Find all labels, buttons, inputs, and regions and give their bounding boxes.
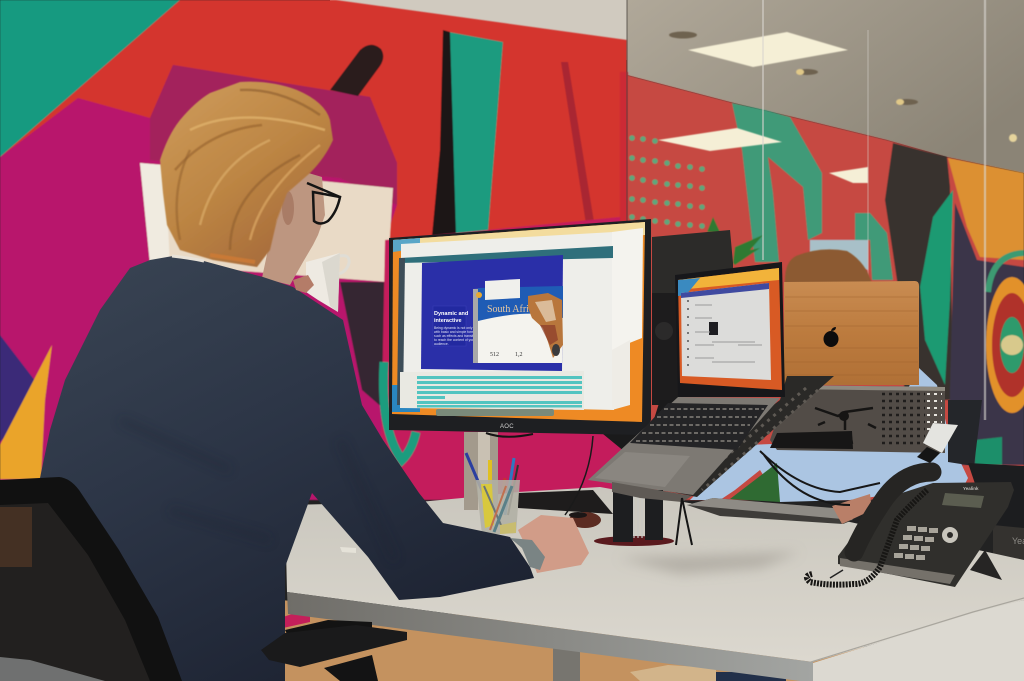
- ear: [282, 191, 294, 225]
- second desk: [813, 600, 1024, 681]
- small paper on desk: [340, 547, 356, 553]
- circular mural emblem: [986, 277, 1024, 413]
- monitor logo: AOC: [500, 424, 514, 430]
- mural: magenta block: [0, 65, 397, 500]
- desk phone: Yealink: [963, 486, 979, 491]
- desk seam: [811, 598, 1024, 662]
- timeline panel: [400, 371, 584, 410]
- right side panel: [612, 228, 643, 350]
- floor under desk: [280, 600, 1024, 681]
- phone nav pad: [942, 527, 958, 543]
- dark mural panel: [885, 143, 953, 400]
- open laptop: [588, 262, 785, 495]
- blue trouser of second person: [716, 672, 786, 681]
- laptop stand base: [594, 482, 692, 546]
- phone display: [942, 493, 984, 508]
- chair frame: [0, 477, 182, 681]
- navy mural panel: [948, 203, 1024, 465]
- hand on mouse: [518, 515, 589, 573]
- dark riser arm: [770, 431, 853, 449]
- laptop keyboard deck: [588, 397, 780, 495]
- dock: [436, 409, 554, 416]
- mesh pencil cup with pens: [466, 453, 520, 535]
- background dark monitor behind: [948, 400, 1024, 560]
- monitor foot shadow: [486, 433, 533, 437]
- monitor cable: [565, 436, 593, 515]
- metal pen holder: [464, 432, 498, 510]
- armrest: [261, 625, 407, 667]
- laptop stand perforated tray: [662, 376, 834, 497]
- slide text block: Being dynamic is not only: [434, 326, 473, 330]
- pale floor stripe: [630, 665, 716, 681]
- coiled cord: [807, 490, 927, 585]
- mug: [306, 253, 349, 312]
- slide text block: to reach the content of your: [434, 338, 476, 342]
- monitor bezel: [389, 219, 651, 435]
- seated person: [40, 82, 589, 681]
- sweater torso and arm: [40, 256, 534, 681]
- desk: [285, 487, 1024, 681]
- mural: yellow triangle: [0, 345, 52, 479]
- monitor app window: [401, 232, 614, 410]
- mural wall: [0, 0, 640, 500]
- desk front edge: [287, 592, 813, 681]
- hair: [160, 82, 333, 267]
- wrist watch: [510, 538, 545, 570]
- mural: dark cup strip: [340, 282, 387, 410]
- slide white card: 1,2: [515, 352, 522, 358]
- desk leg: [553, 640, 580, 681]
- slide text block: [433, 306, 480, 346]
- wooden laptop lid: [784, 281, 919, 385]
- desk phone: [807, 472, 1014, 587]
- glass edges: [627, 0, 985, 420]
- glasses: [307, 183, 340, 224]
- trackpad: [595, 452, 690, 487]
- mural: plum cup lid: [150, 65, 397, 205]
- phone lower strip: [840, 558, 955, 584]
- slide white card: [473, 279, 563, 363]
- ceiling lights: [658, 32, 1017, 183]
- person two behind laptop: [690, 249, 968, 502]
- slide blue background: [421, 255, 563, 371]
- mural: black band shadow: [432, 30, 456, 236]
- second person shirt: [690, 368, 968, 502]
- mural: lower magenta: [380, 215, 640, 500]
- phone keypad: [894, 526, 938, 560]
- teal reflected stripes: [732, 103, 822, 262]
- mural: cream cup: [140, 163, 393, 282]
- magenta strip under arm: [283, 608, 310, 628]
- pale blue window reflection: [810, 240, 868, 270]
- mural: red stripe: [561, 62, 594, 224]
- cables: [760, 451, 880, 505]
- laptop lid: [675, 262, 785, 397]
- back of armrest: [285, 620, 372, 640]
- white adapter: [917, 423, 958, 463]
- phone stand: [970, 550, 1002, 580]
- sweater folds: [120, 420, 395, 560]
- monitor arm and pole: [603, 230, 733, 452]
- tablet on desk: [687, 498, 853, 524]
- slide text block: audience.: [434, 342, 449, 346]
- plant behind monitor: [707, 217, 763, 265]
- mural: teal corner: [0, 0, 180, 157]
- mural: teal arc: [383, 362, 416, 460]
- ceiling: [330, 0, 1024, 173]
- second person hair: [785, 249, 872, 284]
- cord thin lead: [830, 570, 843, 578]
- mural: black straw: [330, 45, 383, 96]
- chair base bottom: [0, 657, 105, 681]
- black desk mat: [518, 490, 613, 514]
- riser mount bracket: [815, 408, 876, 444]
- slide text block: with basic and simple forms: [434, 330, 476, 334]
- Africa map: [528, 293, 563, 358]
- skin face and neck: [262, 172, 325, 285]
- slide text block: such as effects and transitions: [434, 334, 480, 338]
- slide text block: Dynamic and: [434, 311, 468, 317]
- card blue header: [478, 286, 563, 321]
- phone handset: [854, 472, 932, 552]
- office chair: [0, 477, 407, 681]
- card popup: [485, 279, 520, 300]
- card stat numbers: 512: [490, 352, 499, 358]
- phone body: [838, 482, 1014, 587]
- green mural arc: [988, 253, 1024, 292]
- desk shadow: [618, 552, 800, 574]
- perforated laptop riser plate: [770, 385, 945, 453]
- hand on mug: [293, 275, 314, 293]
- hair strands: [175, 90, 325, 262]
- slide text block: interactive: [434, 318, 462, 324]
- collar: [172, 256, 204, 261]
- apple logo: [824, 327, 838, 347]
- plant between arm and body: [730, 463, 780, 502]
- monitor desktop background: [392, 222, 645, 422]
- second person hand: [832, 494, 872, 524]
- green dot pattern: [629, 135, 705, 229]
- mouse: [569, 512, 601, 528]
- green mural leaf: [920, 190, 953, 385]
- app toolbar: [400, 246, 613, 263]
- chair mesh: [0, 503, 150, 681]
- mural: teal band: [449, 32, 503, 234]
- laptop window: [681, 283, 771, 380]
- card title: South Africa: [487, 304, 538, 315]
- orange mural panel: [948, 158, 1024, 260]
- glass partition with reflected mural: [620, 72, 1024, 500]
- riser perforations: [882, 394, 925, 443]
- mural: blue triangle: [0, 335, 46, 442]
- laptop screen wallpaper: [678, 268, 782, 390]
- main monitor: [389, 219, 651, 435]
